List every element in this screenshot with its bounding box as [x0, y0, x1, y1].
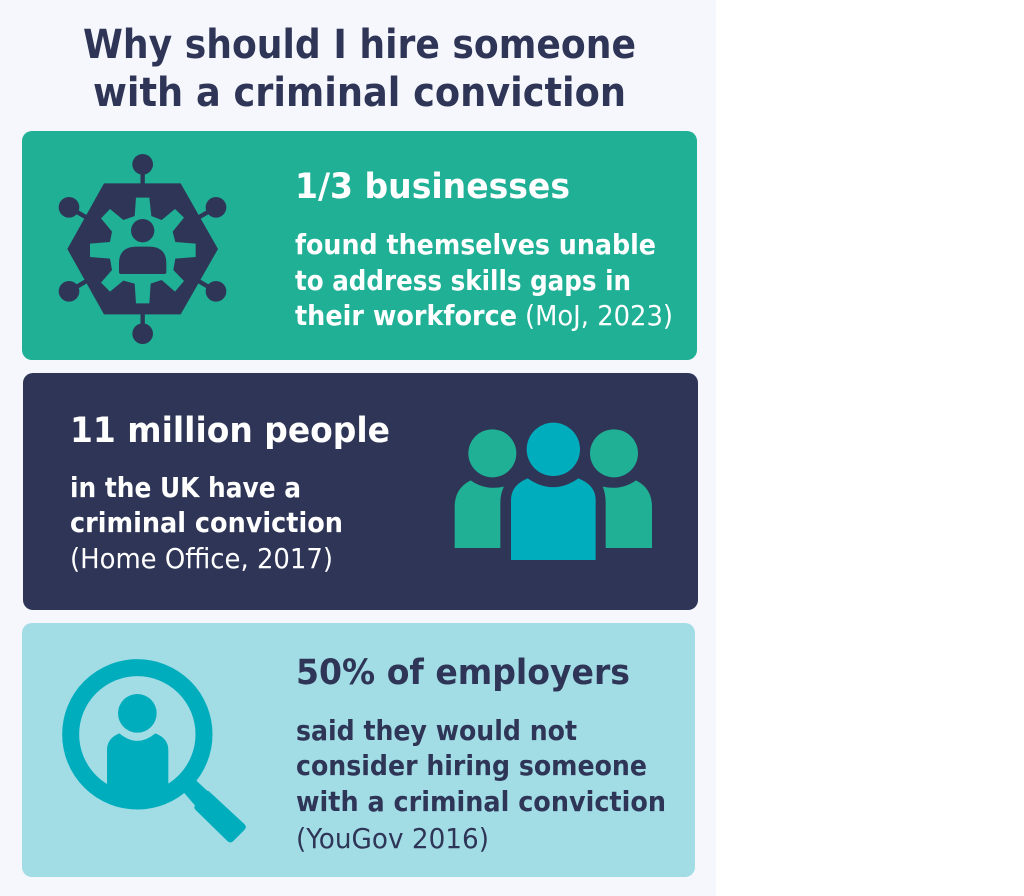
panel: 50% of employers	[22, 623, 695, 877]
icon: magnifying glass over person	[71, 668, 246, 842]
panel 3 body text: with a criminal conviction	[296, 785, 666, 818]
panel 1 body text: (MoJ, 2023)	[525, 299, 673, 332]
panel 1 body text: to address skills gaps in	[295, 264, 631, 297]
panel 3 heading: 50% of employers	[296, 653, 630, 693]
panel 2 body text	[70, 471, 343, 575]
panel 3 body text: said they would not	[296, 714, 577, 747]
title	[83, 22, 636, 116]
panel 1 body text: their workforce	[295, 299, 517, 332]
panel 2 body text: in the UK have a	[70, 471, 301, 504]
panel 1 body text: found themselves unable	[295, 228, 656, 261]
panel 1 heading: 1/3 businesses	[295, 167, 570, 207]
panel 3 body text	[296, 714, 666, 855]
panel 2 body text: (Home Office, 2017)	[70, 542, 333, 575]
panel: 11 million people	[23, 373, 698, 610]
panel: 1/3 businesses	[22, 131, 697, 360]
panel 3 body text: consider hiring someone	[296, 749, 647, 782]
icon: group of three people	[455, 423, 652, 560]
panel 2 heading: 11 million people	[70, 411, 390, 451]
panel 3 body text: (YouGov 2016)	[296, 822, 489, 855]
panel 1 body text	[295, 228, 673, 332]
panel 2 body text: criminal conviction	[70, 506, 343, 539]
title: with a criminal conviction	[93, 70, 626, 116]
title: Why should I hire someone	[83, 22, 636, 68]
icon: hexagon gear with person and network nodes	[59, 154, 226, 344]
